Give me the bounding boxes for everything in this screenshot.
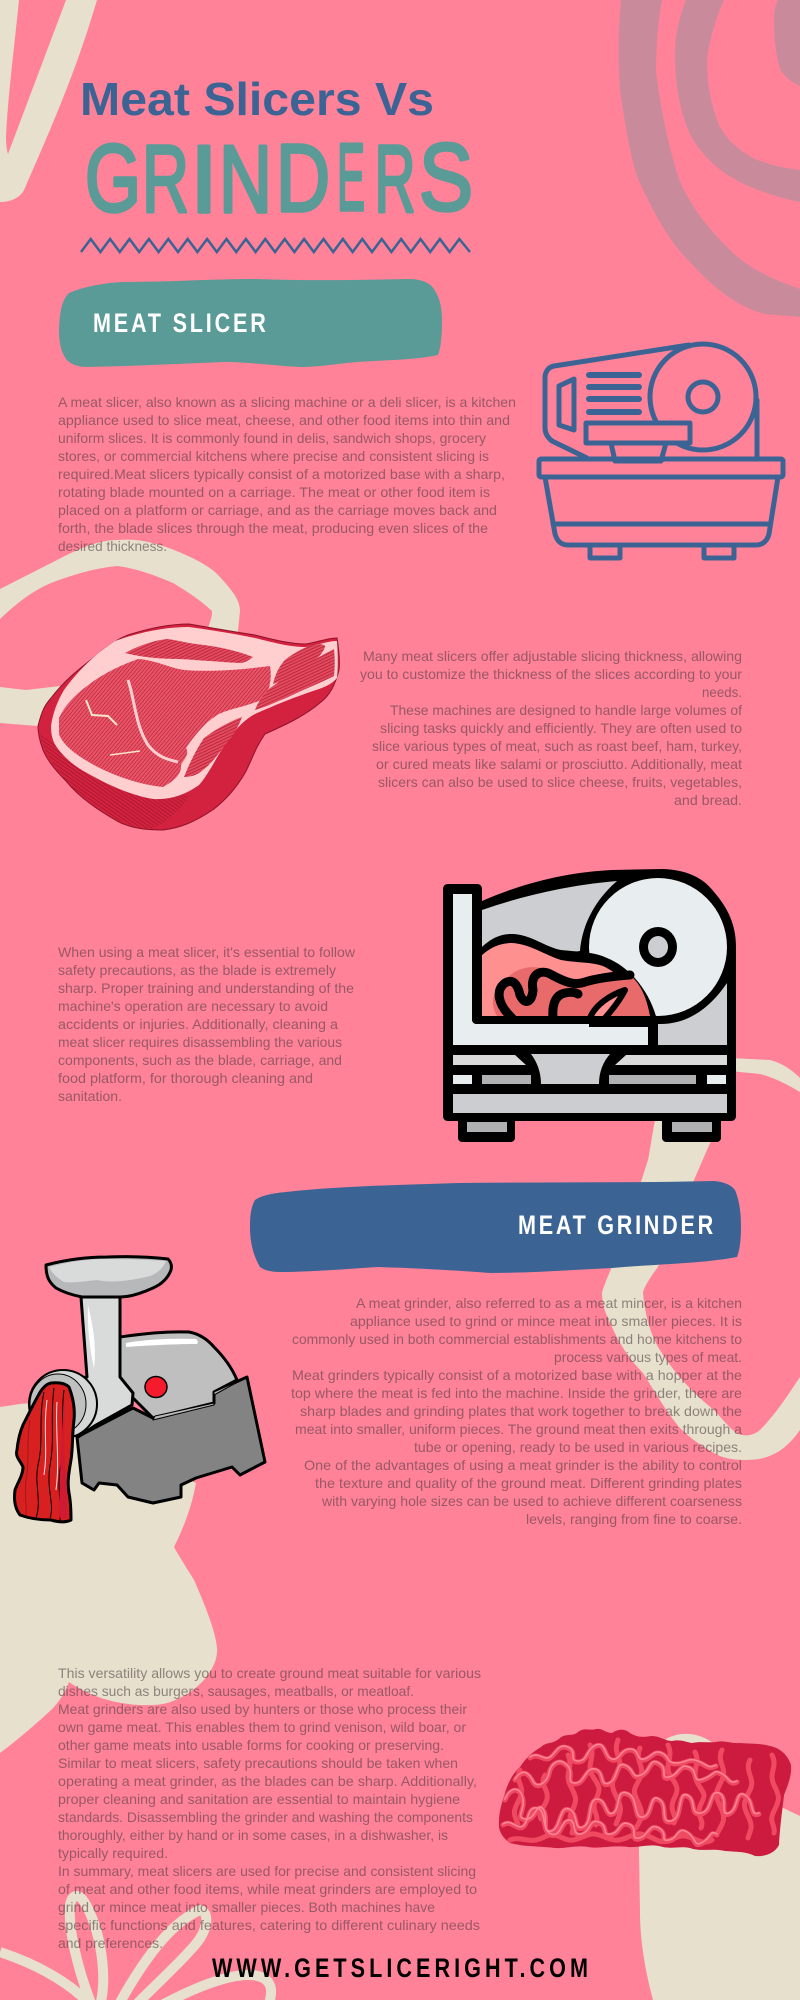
- body text: safety precautions: safety precautions, as the blade is extremely: [58, 962, 336, 978]
- illustration: black outline slicer with meat: [443, 869, 736, 1142]
- title: Grinders: G: [85, 125, 141, 232]
- body text: versatility and summary: specific functions and features, catering to different culinary needs: [58, 1917, 480, 1933]
- body text: versatility and summary: typically required.: [58, 1845, 168, 1861]
- section banner: meat grinder: MEAT GRINDER: [518, 1211, 714, 1241]
- body text: meat grinder intro: Meat grinders typically consist of a motorized base with a hopper at the: [292, 1367, 742, 1383]
- decoration: bottom-right cream blob: [639, 1734, 800, 2000]
- body text: slicing thickness: [360, 648, 742, 808]
- body text: meat grinder intro: [291, 1295, 742, 1527]
- title: Grinders: [85, 124, 473, 233]
- body text: versatility and summary: Meat grinders are also used by hunters or those who process their: [58, 1701, 467, 1717]
- body text: meat grinder intro: appliance used to grind or mince meat into smaller pieces. It is: [350, 1313, 742, 1329]
- body text: slicing thickness: slicing tasks quickly and efficiently. They are often used to: [380, 720, 742, 736]
- section banner: meat slicer: [59, 279, 442, 367]
- body text: safety precautions: sanitation.: [58, 1088, 122, 1104]
- decoration: bottom-left flower: [0, 1896, 271, 2000]
- body text: versatility and summary: grind or mince meat into smaller pieces. Both machines have: [58, 1899, 435, 1915]
- illustration: raw steak: [38, 624, 339, 830]
- body text: slicing thickness: slice various types of meat, such as roast beef, ham, turkey,: [372, 738, 742, 754]
- body text: safety precautions: accidents or injuries. Additionally, cleaning a: [58, 1016, 338, 1032]
- body text: meat grinder intro: the texture and quality of the ground meat. Different grinding plates: [315, 1475, 742, 1491]
- body text: meat slicer intro: placed on a platform or carriage, and as the carriage moves back and: [58, 502, 497, 518]
- body text: versatility and summary: This versatility allows you to create ground meat suitable for various: [58, 1665, 481, 1681]
- body text: meat grinder intro: top where the meat is fed into the machine. Inside the grinder, there are: [291, 1385, 742, 1401]
- body text: meat slicer intro: desired thickness.: [58, 538, 167, 554]
- title: Grinders: N: [219, 126, 272, 233]
- body text: safety precautions: machine's operation are necessary to avoid: [58, 998, 328, 1014]
- body text: slicing thickness: Many meat slicers offer adjustable slicing thickness, allowing: [363, 648, 742, 664]
- body text: versatility and summary: and preferences.: [58, 1935, 163, 1951]
- body text: meat slicer intro: required.Meat slicers typically consist of a motorized base with a sharp,: [58, 466, 505, 482]
- body text: meat grinder intro: levels, ranging from fine to coarse.: [526, 1511, 742, 1527]
- body text: meat grinder intro: sharp blades and grinding plates that work together to break down the: [300, 1403, 742, 1419]
- body text: versatility and summary: proper cleaning and sanitation are essential to maintain hygiene: [58, 1791, 460, 1807]
- body text: safety precautions: food platform, for thorough cleaning and: [58, 1070, 313, 1086]
- body text: versatility and summary: In summary, meat slicers are used for precise and consistent slicing: [58, 1863, 476, 1879]
- body text: slicing thickness: you to customize the thickness of the slices according to your: [360, 666, 742, 682]
- body text: meat slicer intro: appliance used to slice meat, cheese, and other food items into thin and: [58, 412, 510, 428]
- body text: versatility and summary: operating a meat grinder, as the blades can be sharp. Additionally,: [58, 1773, 477, 1789]
- illustration: meat grinder: [15, 1257, 265, 1522]
- body text: slicing thickness: needs.: [702, 684, 742, 700]
- body text: versatility and summary: dishes such as burgers, sausages, meatballs, or meatloaf.: [58, 1683, 414, 1699]
- body text: meat grinder intro: commonly used in both commercial establishments and home kitchens to: [292, 1331, 742, 1347]
- decoration: right cream ribbon: [602, 1058, 800, 1460]
- body text: versatility and summary: Similar to meat slicers, safety precautions should be taken when: [58, 1755, 458, 1771]
- footer: website url: WWW.GETSLICERIGHT.COM: [212, 1954, 588, 1984]
- body text: safety precautions: [58, 944, 356, 1104]
- section banner: meat slicer: MEAT SLICER: [93, 309, 266, 339]
- decoration: bottom-left cream blob: [0, 1403, 217, 1753]
- body text: slicing thickness: These machines are designed to handle large volumes of: [390, 702, 742, 718]
- body text: meat grinder intro: with varying hole sizes can be used to achieve different coarseness: [321, 1493, 742, 1509]
- body text: meat grinder intro: tube or opening, ready to be used in various recipes.: [414, 1439, 742, 1455]
- body text: safety precautions: meat slicer requires disassembling the various: [58, 1034, 342, 1050]
- decoration: top-left cream stroke: [0, 0, 97, 202]
- body text: versatility and summary: thoroughly, either by hand or in some cases, in a dishwasher, is: [58, 1827, 448, 1843]
- title: Grinders: S: [419, 124, 473, 231]
- body text: slicing thickness: slicers can also be used to slice cheese, fruits, vegetables,: [378, 774, 742, 790]
- body text: meat grinder intro: One of the advantages of using a meat grinder is the ability to control: [304, 1457, 742, 1473]
- body text: versatility and summary: of meat and other food items, while meat grinders are employed to: [58, 1881, 477, 1897]
- body text: slicing thickness: or cured meats like salami or prosciutto. Additionally, meat: [376, 756, 742, 772]
- section banner: meat grinder: [250, 1181, 741, 1273]
- body text: versatility and summary: standards. Disassembling the grinder and washing the components: [58, 1809, 473, 1825]
- body text: meat slicer intro: uniform slices. It is commonly found in delis, sandwich shops, grocery: [58, 430, 486, 446]
- illustration: ground meat: [495, 1725, 795, 1860]
- body text: versatility and summary: other game meats into usable forms for cooking or preserving.: [58, 1737, 444, 1753]
- title: Grinders: R: [374, 126, 416, 233]
- body text: meat slicer intro: [58, 394, 516, 554]
- title: Grinders: E: [337, 124, 365, 231]
- body text: meat slicer intro: rotating blade mounted on a carriage. The meat or other food item is: [58, 484, 490, 500]
- body text: meat grinder intro: A meat grinder, also referred to as a meat mincer, is a kitchen: [356, 1295, 742, 1311]
- icon: blue outline meat slicer: [539, 344, 783, 558]
- body text: versatility and summary: [58, 1665, 481, 1951]
- body text: meat slicer intro: stores, or commercial kitchens where precise and consistent slicing is: [58, 448, 489, 464]
- decoration: cream loop behind steak: [0, 540, 240, 726]
- body text: versatility and summary: own game meat. This enables them to grind venison, wild boar, or: [58, 1719, 466, 1735]
- title: Meat Slicers Vs: Meat Slicers Vs: [80, 73, 434, 125]
- body text: safety precautions: When using a meat slicer, it's essential to follow: [58, 944, 356, 960]
- title: Grinders: R: [142, 126, 189, 233]
- title: Grinders: I: [190, 126, 218, 233]
- title: Grinders: D: [276, 125, 330, 232]
- body text: safety precautions: components, such as the blade, carriage, and: [58, 1052, 342, 1068]
- body text: slicing thickness: and bread.: [674, 792, 742, 808]
- body text: safety precautions: sharp. Proper training and understanding of the: [58, 980, 354, 996]
- body text: meat slicer intro: forth, the blade slices through the meat, producing even slices of the: [58, 520, 488, 536]
- body text: meat grinder intro: meat into smaller, uniform pieces. The ground meat then exits through a: [295, 1421, 742, 1437]
- body text: meat grinder intro: process various types of meat.: [554, 1349, 742, 1365]
- body text: meat slicer intro: A meat slicer, also known as a slicing machine or a deli slicer, is a kitchen: [58, 394, 516, 410]
- zigzag divider: [81, 239, 470, 252]
- decoration: top-right mauve rings: [619, 0, 800, 317]
